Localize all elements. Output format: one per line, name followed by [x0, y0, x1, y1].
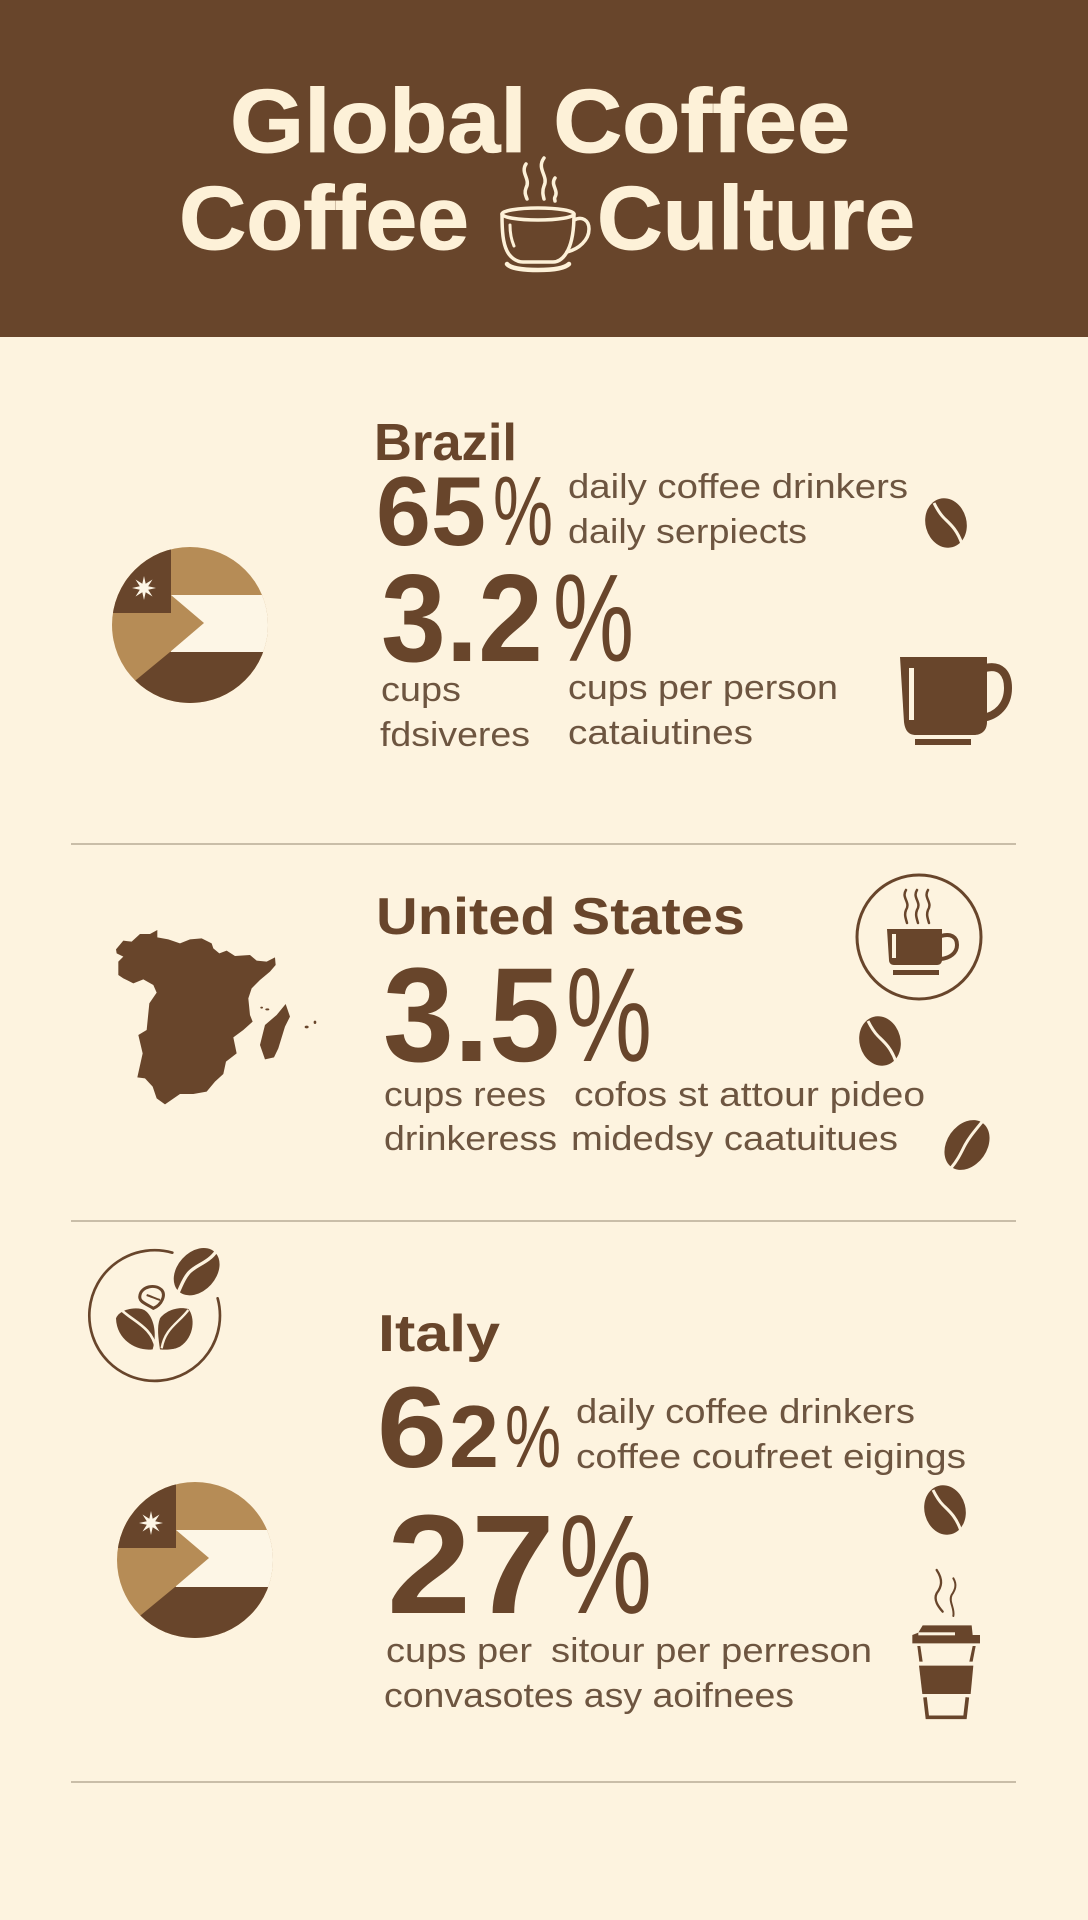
stat: 65%: 65 [376, 456, 486, 566]
text: cups fdsiveres: cups [381, 671, 461, 709]
heading: Brazil: Brazil [374, 414, 517, 472]
stat: 65% [376, 456, 553, 566]
stat: 3.5% [383, 941, 652, 1090]
divider [71, 843, 1016, 845]
divider [71, 1220, 1016, 1222]
text: cups per person: cups per person [568, 669, 838, 707]
title: Coffee [179, 169, 469, 269]
text: cups fdsiveres: fdsiveres [380, 716, 530, 754]
text: daily coffee drinkers: coffee coufreet eigings [576, 1438, 966, 1476]
text: cups per sitour: cups per [386, 1632, 532, 1670]
icon: mug [900, 657, 1008, 745]
stat: 62%: 2 [449, 1387, 499, 1486]
stat: 62% [377, 1364, 561, 1492]
panel: United States [116, 875, 999, 1179]
icon: flag badge Italy [115, 1482, 273, 1638]
text: cups rees: cups rees [384, 1076, 546, 1114]
heading: Italy: Italy [378, 1305, 500, 1363]
text: daily coffee drinkers: daily coffee drinkers [568, 468, 908, 506]
text: cups per sitour: convasotes asy aoifnees [384, 1677, 794, 1715]
stat: 3.2%: 3.2 [381, 550, 543, 688]
panel: Brazil [110, 414, 1008, 754]
title: Culture [597, 169, 915, 269]
text: daily coffee drinkers: daily coffee drinkers [576, 1393, 915, 1431]
icon: coffee bean [935, 1111, 999, 1179]
stat: 3.5%: 3.5 [383, 941, 560, 1090]
title: Global Coffee [230, 72, 850, 172]
stat: 27% [387, 1485, 652, 1643]
icon: map silhouette [116, 930, 316, 1104]
icon: beans in circle [89, 1239, 229, 1381]
header banner [0, 0, 1088, 337]
text: cups rees [384, 1076, 557, 1158]
icon: coffee bean [920, 494, 972, 552]
text: cofos st attour pideo: cofos st attour pideo [574, 1076, 925, 1114]
icon: steaming coffee cup [502, 158, 589, 270]
icon: flag badge Brazil [110, 547, 268, 703]
text: cofos st attour pideo [571, 1076, 925, 1158]
text: cups rees: drinkeress [384, 1120, 557, 1158]
icon: coffee bean [919, 1481, 971, 1539]
divider [71, 1781, 1016, 1783]
stat: 27%: 27 [387, 1485, 555, 1643]
icon: cup in circle [857, 875, 981, 999]
text: cups per sitour: sitour per perreson [551, 1632, 872, 1670]
text: cups fdsiveres [380, 671, 530, 754]
text: daily coffee drinkers: daily serpiects [568, 513, 807, 551]
stat: 3.2%: % [553, 550, 634, 688]
title [179, 72, 915, 269]
text: daily coffee drinkers [576, 1393, 966, 1476]
text: daily coffee drinkers [568, 468, 908, 551]
text: cofos st attour pideo: midedsy caatuitues [571, 1120, 898, 1158]
panel: Italy [89, 1239, 980, 1717]
stat: 65%: % [493, 456, 553, 566]
icon: coffee bean [854, 1012, 906, 1070]
stat: 3.2% [381, 550, 634, 688]
stat: 62%: % [505, 1387, 561, 1486]
stat: 3.5%: % [566, 941, 652, 1090]
text: cups per person [568, 669, 838, 752]
stat: 27%: % [559, 1485, 652, 1643]
text: cups per sitour [384, 1632, 872, 1715]
text: cups per person: cataiutines [568, 714, 753, 752]
heading: United States: United States [376, 888, 745, 946]
stat: 62%: 6 [377, 1364, 447, 1492]
icon: takeaway cup with steam [912, 1570, 980, 1717]
